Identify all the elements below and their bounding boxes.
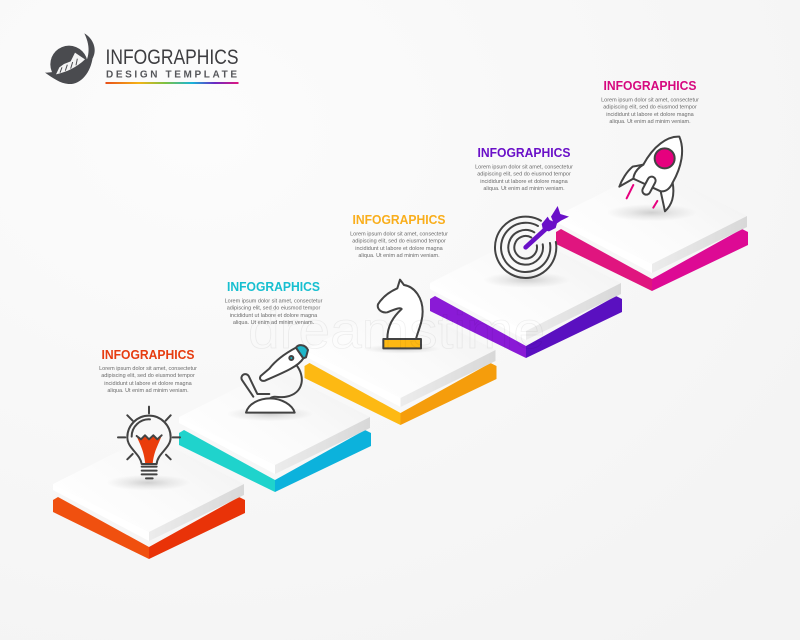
text block: aliqua. Ut enim ad minim veniam. (233, 320, 315, 326)
platform (556, 168, 748, 291)
heading: INFOGRAPHICS (102, 348, 194, 362)
heading: INFOGRAPHICS (604, 79, 696, 93)
text block: Lorem ipsum dolor sit amet, consectetur (99, 366, 197, 372)
icon: chess knight (363, 280, 440, 354)
panel: step 5 pink (556, 79, 748, 291)
panel: step 2 teal (179, 280, 371, 492)
text block: aliqua. Ut enim ad minim veniam. (107, 388, 189, 394)
logo mark (45, 33, 95, 84)
text block: adipiscing elit, sed do eiusmod tempor (477, 172, 571, 178)
platform (53, 436, 245, 559)
text block (225, 298, 323, 326)
platform (179, 369, 371, 492)
text block: Lorem ipsum dolor sit amet, consectetur (601, 98, 699, 104)
icon: microscope (227, 345, 313, 421)
text block: incididunt ut labore et dolore magna (480, 179, 569, 185)
panel: step 3 yellow (304, 213, 496, 425)
watermark: dreamstime (248, 302, 545, 360)
icon: rocket (607, 137, 697, 221)
text block: Lorem ipsum dolor sit amet, consectetur (225, 298, 323, 304)
text block (350, 232, 448, 259)
heading: INFOGRAPHICS (352, 213, 446, 227)
text block: incididunt ut labore et dolore magna (355, 246, 444, 252)
text block: aliqua. Ut enim ad minim veniam. (358, 253, 440, 259)
icon: target (483, 206, 570, 288)
text block: incididunt ut labore et dolore magna (104, 381, 193, 387)
text block: aliqua. Ut enim ad minim veniam. (609, 119, 691, 125)
text block: adipiscing elit, sed do eiusmod tempor (227, 306, 320, 312)
text block (601, 98, 699, 125)
rainbow bar (106, 82, 238, 84)
text block (99, 366, 197, 394)
platform (430, 235, 622, 358)
panel: step 1 red (53, 348, 245, 559)
text block: Lorem ipsum dolor sit amet, consectetur (475, 164, 573, 170)
text block (475, 164, 573, 192)
text block: Lorem ipsum dolor sit amet, consectetur (350, 232, 448, 238)
text block: aliqua. Ut enim ad minim veniam. (483, 186, 565, 192)
text block: incididunt ut labore et dolore magna (606, 112, 695, 118)
text block: adipiscing elit, sed do eiusmod tempor (603, 104, 697, 110)
heading: INFOGRAPHICS (227, 280, 320, 294)
text block: adipiscing elit, sed do eiusmod tempor (101, 373, 195, 379)
panel: step 4 purple (430, 146, 622, 358)
logo subtitle: DESIGN TEMPLATE (106, 70, 237, 80)
heading: INFOGRAPHICS (478, 146, 570, 160)
icon: light bulb (107, 407, 190, 491)
platform (304, 302, 496, 425)
logo (45, 33, 238, 84)
text block: incididunt ut labore et dolore magna (230, 313, 318, 319)
text block: adipiscing elit, sed do eiusmod tempor (352, 238, 446, 244)
logo title: INFOGRAPHICS (106, 46, 238, 69)
